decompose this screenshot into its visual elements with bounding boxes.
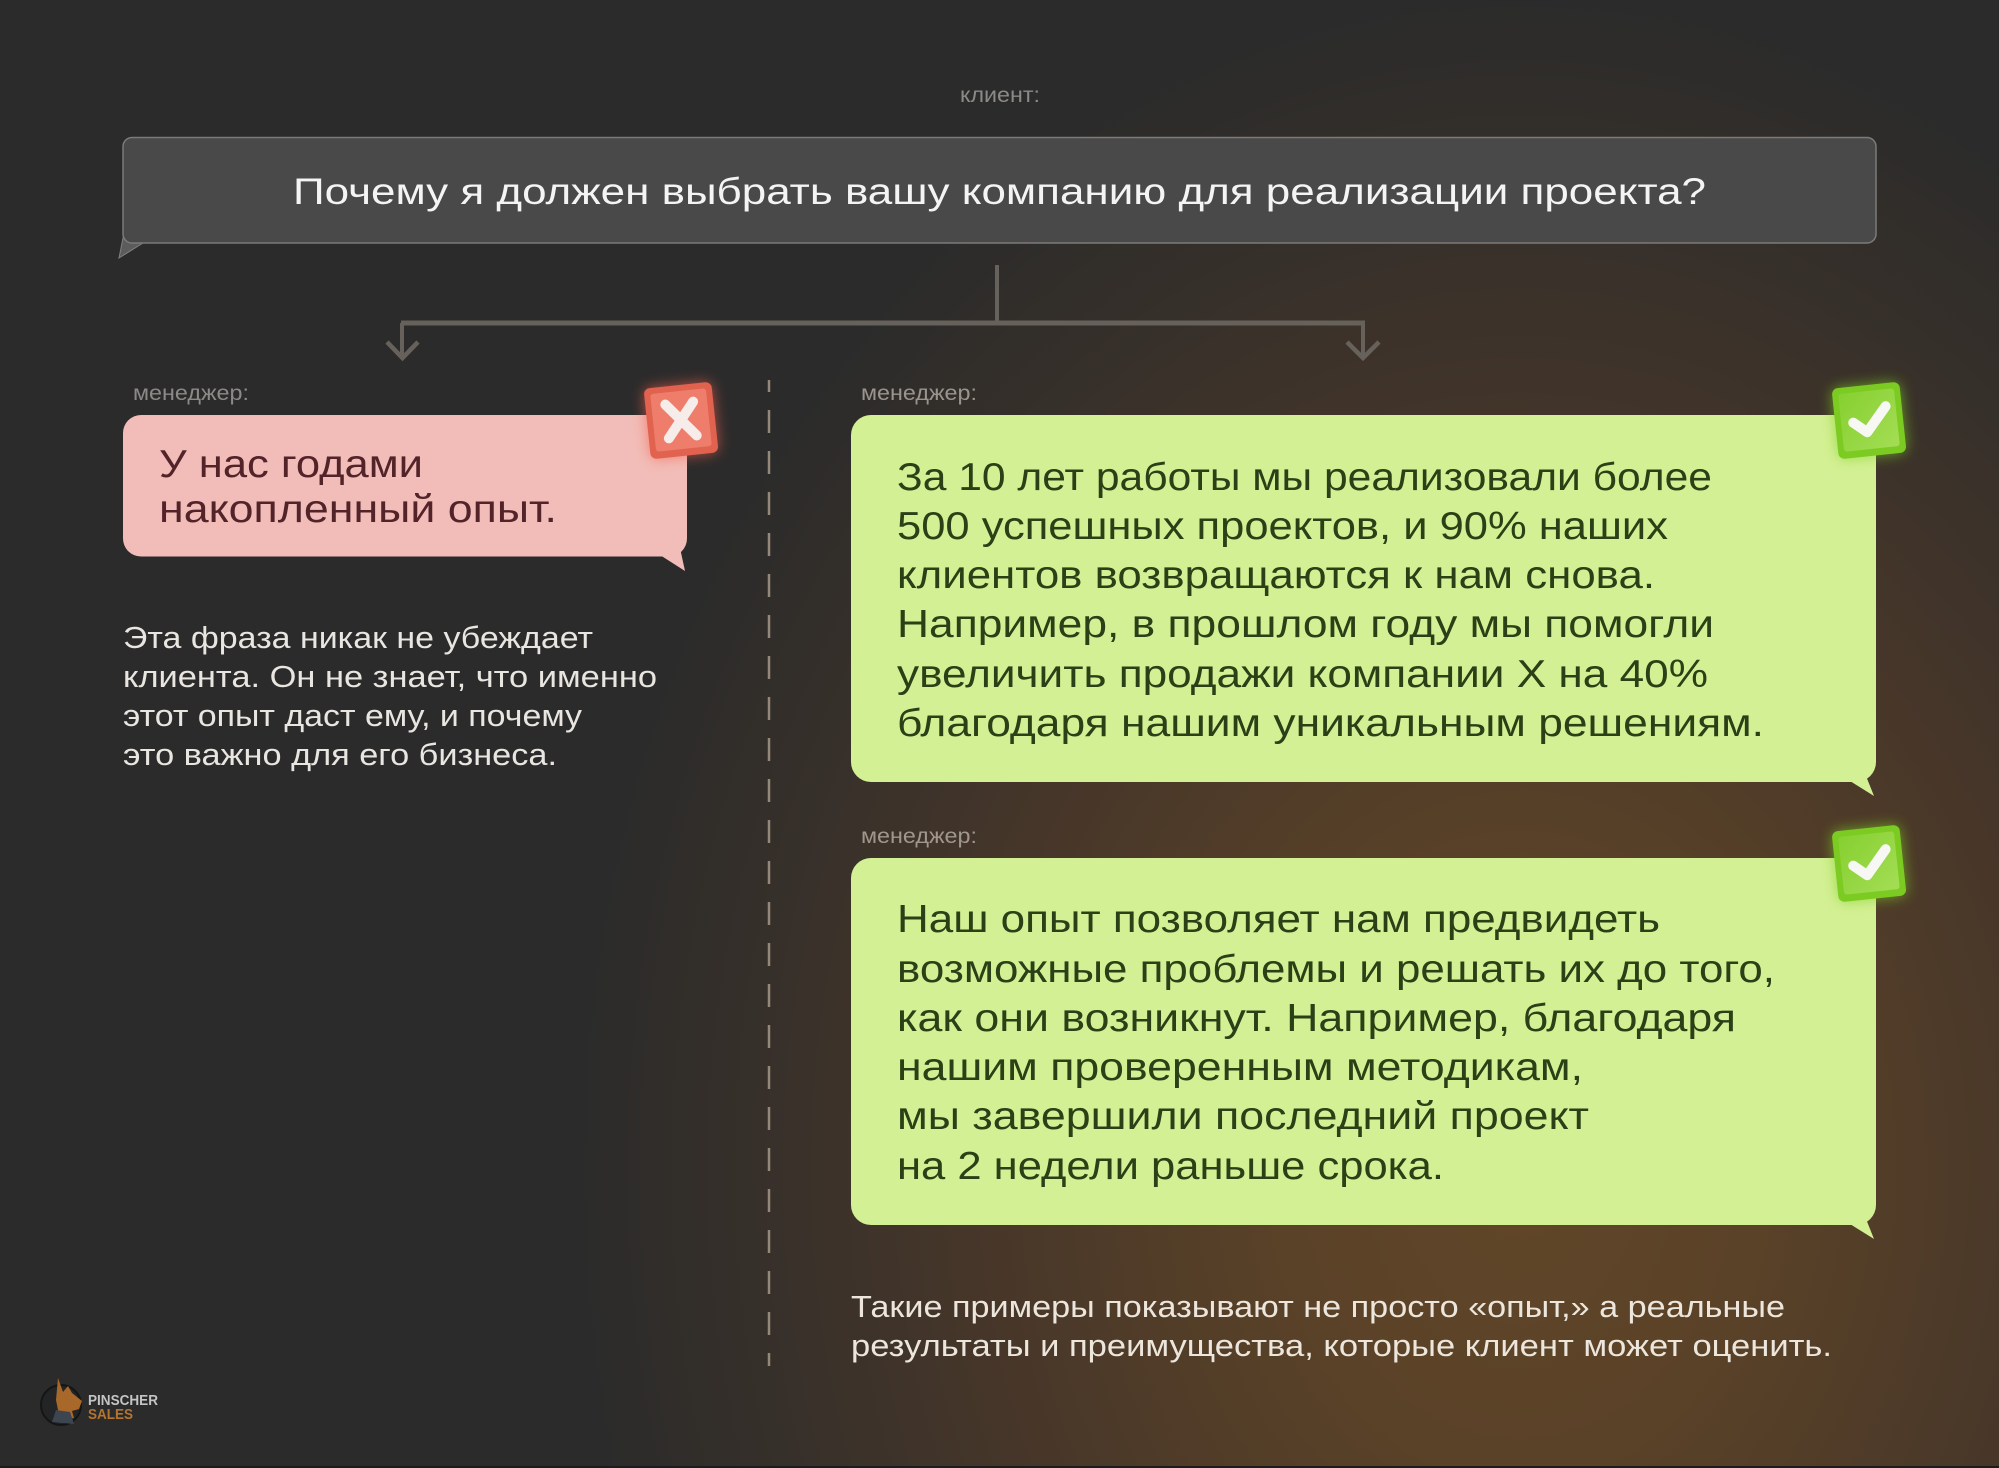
panel: bad answer bubble (123, 415, 687, 571)
panel: bad answer bubble: накопленный опыт. (159, 488, 557, 531)
panel: good answer bubble 2: нашим проверенным методикам, (897, 1046, 1583, 1089)
panel: good answer bubble 2 (851, 858, 1876, 1239)
label: manager, good example 2: менеджер: (861, 825, 977, 848)
explanation text: bad example: этот опыт даст ему, и почему (123, 698, 583, 733)
icon: red cross badge (644, 382, 719, 459)
client question bubble (119, 138, 1876, 258)
logo: Pinscher Sales: PINSCHER (88, 1393, 158, 1409)
label: manager, good example 1: менеджер: (861, 382, 977, 405)
panel: good answer bubble 1: клиентов возвращаются к нам снова. (897, 554, 1655, 597)
explanation text: bad example (123, 620, 657, 772)
conclusion text: Такие примеры показывают не просто «опыт,» а реальные (851, 1289, 1785, 1324)
connector arrows (387, 265, 1379, 358)
conclusion text (851, 1289, 1832, 1363)
explanation text: bad example: это важно для его бизнеса. (123, 737, 557, 772)
panel: good answer bubble 1: За 10 лет работы мы реализовали более (897, 456, 1712, 499)
icon: green check badge 2 (1832, 825, 1907, 902)
panel: good answer bubble 1 (851, 415, 1876, 796)
dashed divider (768, 380, 770, 1366)
logo: Pinscher Sales: SALES (88, 1407, 133, 1423)
explanation text: bad example: Эта фраза никак не убеждает (123, 620, 593, 655)
conclusion text: результаты и преимущества, которые клиент может оценить. (851, 1328, 1832, 1363)
panel: good answer bubble 1: 500 успешных проектов, и 90% наших (897, 505, 1669, 548)
client question bubble: Почему я должен выбрать вашу компанию для реализации проекта? (293, 171, 1706, 212)
panel: good answer bubble 2: Наш опыт позволяет нам предвидеть (897, 898, 1660, 941)
logo: Pinscher Sales (41, 1378, 158, 1425)
panel: good answer bubble 1: благодаря нашим уникальным решениям. (897, 702, 1764, 745)
icon: green check badge 1 (1832, 382, 1907, 459)
panel: good answer bubble 2: мы завершили последний проект (897, 1095, 1589, 1138)
panel: bad answer bubble: У нас годами (159, 443, 423, 486)
panel: good answer bubble 2: возможные проблемы и решать их до того, (897, 948, 1775, 991)
panel: good answer bubble 2: на 2 недели раньше срока. (897, 1145, 1444, 1188)
explanation text: bad example: клиента. Он не знает, что именно (123, 659, 657, 694)
label: client: клиент: (960, 84, 1040, 107)
panel: good answer bubble 1: увеличить продажи компании X на 40% (897, 653, 1708, 696)
label: manager, bad example: менеджер: (133, 382, 249, 405)
panel: good answer bubble 1: Например, в прошлом году мы помогли (897, 603, 1714, 646)
panel: good answer bubble 2: как они возникнут. Например, благодаря (897, 997, 1736, 1040)
